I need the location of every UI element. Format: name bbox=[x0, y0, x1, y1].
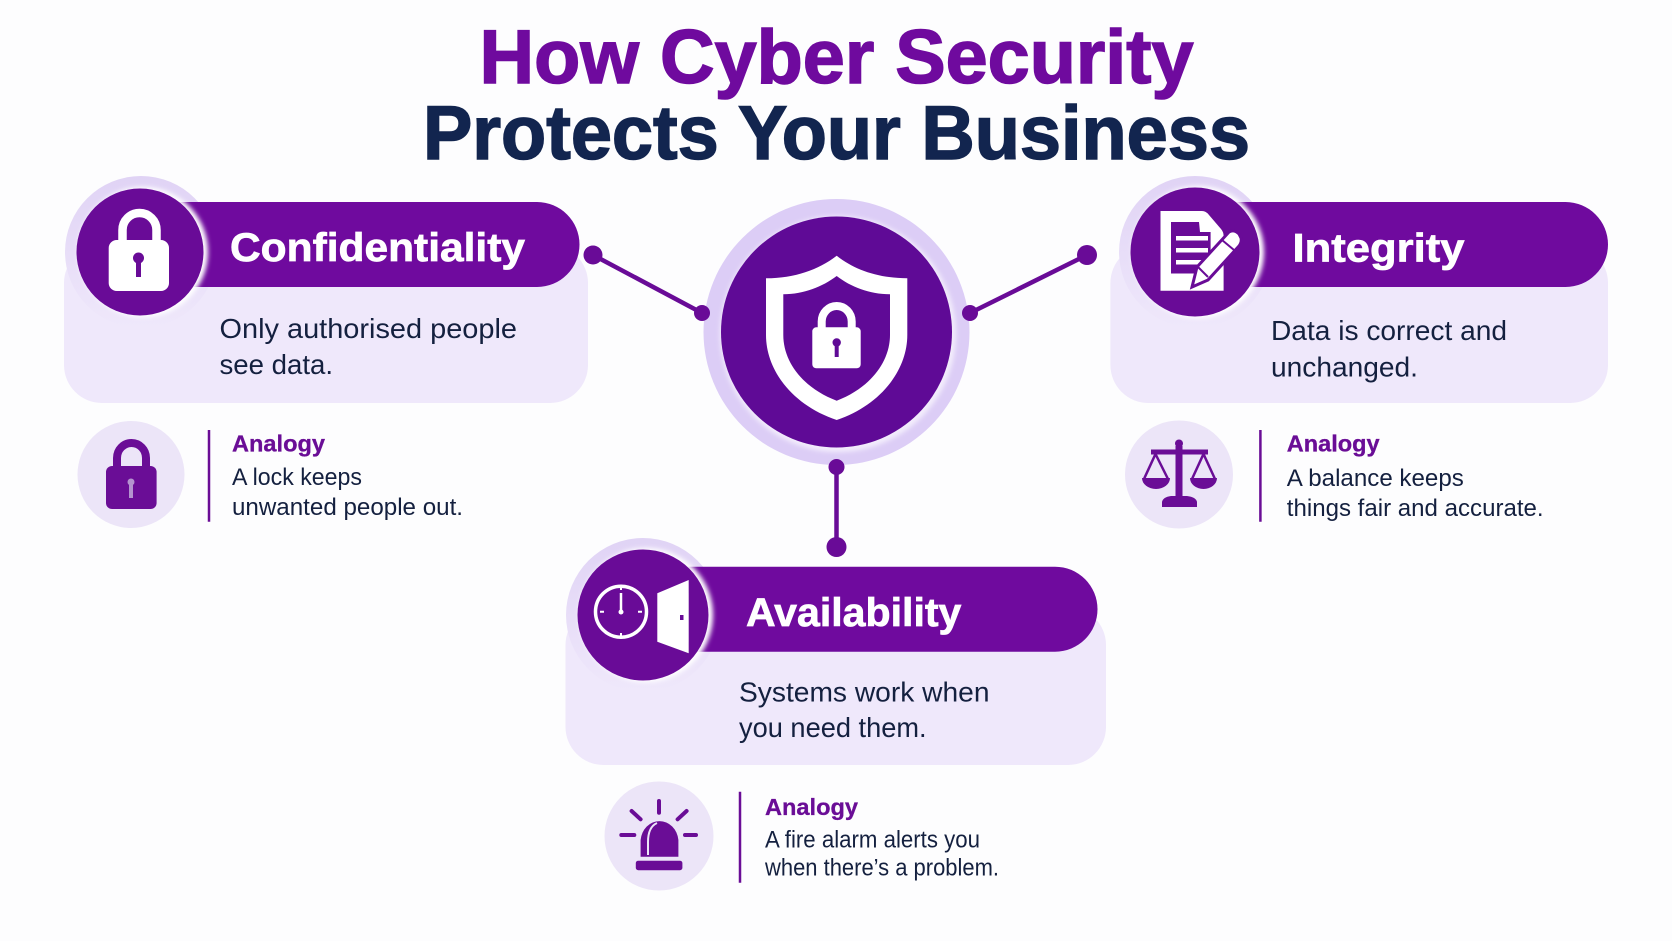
body text: Only authorised people bbox=[220, 313, 517, 344]
title bbox=[423, 15, 1250, 176]
analogy text: when there’s a problem. bbox=[764, 855, 999, 882]
panel: integrity bbox=[1110, 176, 1608, 403]
heading bar: confidentiality: Confidentiality bbox=[230, 226, 526, 270]
analogy text: A lock keeps bbox=[232, 464, 362, 491]
icon: alarm siren bbox=[621, 801, 696, 870]
analogy text bbox=[764, 794, 999, 882]
analogy text: Analogy bbox=[1287, 431, 1380, 457]
connector: centre to availability bbox=[826, 467, 846, 557]
icon: scale bbox=[1142, 440, 1217, 507]
heading bar: availability: Availability bbox=[746, 591, 962, 635]
heading bar: availability bbox=[644, 567, 1098, 652]
body text: unchanged. bbox=[1271, 352, 1418, 383]
icon: clock and door bbox=[578, 550, 708, 680]
analogy text: A balance keeps bbox=[1287, 465, 1464, 492]
analogy text: Analogy bbox=[232, 431, 325, 457]
analogy: fire alarm bbox=[604, 782, 999, 890]
analogy text bbox=[232, 431, 463, 521]
title: How Cyber Security bbox=[480, 15, 1194, 100]
icon: document and pencil bbox=[1130, 188, 1260, 316]
central shield emblem bbox=[694, 199, 978, 475]
connector: centre to confidentiality bbox=[584, 246, 702, 313]
analogy text bbox=[1287, 431, 1544, 522]
analogy: balance scale bbox=[1125, 420, 1544, 528]
heading bar: integrity bbox=[1195, 202, 1608, 287]
analogy text: things fair and accurate. bbox=[1287, 495, 1544, 522]
panel: availability bbox=[566, 538, 1106, 765]
body text: see data. bbox=[220, 349, 333, 380]
body text: Systems work when bbox=[739, 677, 990, 708]
icon: purple padlock bbox=[106, 443, 157, 509]
panel: confidentiality bbox=[64, 176, 588, 403]
title: Protects Your Business bbox=[423, 91, 1250, 176]
body text: you need them. bbox=[739, 712, 927, 743]
analogy text: unwanted people out. bbox=[232, 494, 463, 521]
body text: Data is correct and bbox=[1271, 315, 1507, 346]
icon: white padlock bbox=[76, 188, 204, 316]
icon: shield with lock bbox=[766, 256, 907, 420]
analogy: lock bbox=[78, 421, 463, 528]
heading bar: confidentiality bbox=[140, 202, 580, 287]
connector: centre to integrity bbox=[970, 245, 1097, 313]
analogy text: Analogy bbox=[765, 794, 858, 820]
analogy text: A fire alarm alerts you bbox=[765, 826, 980, 853]
heading bar: integrity: Integrity bbox=[1292, 226, 1465, 270]
